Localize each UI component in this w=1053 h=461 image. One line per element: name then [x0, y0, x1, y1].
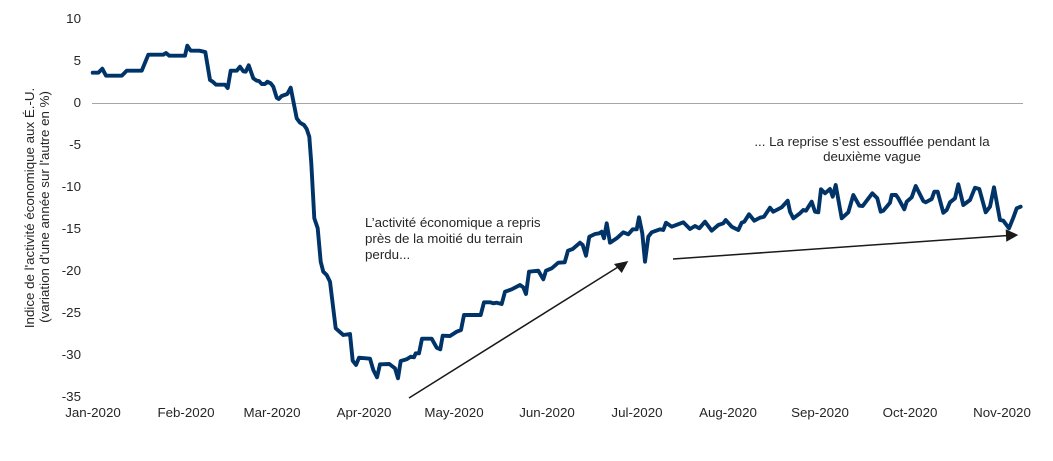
- y axis tick labels: -10: [62, 179, 81, 194]
- x axis month labels: Mar-2020: [243, 405, 301, 420]
- x axis month labels: May-2020: [424, 405, 484, 420]
- annotation: recovery text: près de la moitié du terrain: [365, 231, 523, 246]
- annotation: second wave text: [754, 134, 990, 164]
- x axis month labels: Feb-2020: [157, 405, 215, 420]
- x axis month labels: Nov-2020: [973, 405, 1031, 420]
- annotation: recovery text: [365, 215, 541, 262]
- annotation: second wave text: ... La reprise s’est essoufflée pendant la: [754, 134, 990, 149]
- zero baseline: [92, 102, 1023, 104]
- y axis tick labels: -30: [62, 347, 81, 362]
- x axis month labels: Oct-2020: [883, 405, 937, 420]
- y axis tick labels: 10: [66, 11, 81, 26]
- y axis tick labels: [62, 11, 81, 404]
- annotation: recovery text: perdu...: [365, 247, 410, 262]
- x axis month labels: Sep-2020: [791, 405, 849, 420]
- y axis tick labels: -35: [62, 389, 81, 404]
- y axis tick labels: 0: [74, 95, 81, 110]
- annotation: recovery text: L’activité économique a repris: [365, 215, 541, 230]
- y axis tick labels: -15: [62, 221, 81, 236]
- y axis title: [22, 88, 52, 328]
- y axis tick labels: -25: [62, 305, 81, 320]
- y axis title: (variation d'une année sur l'autre en %): [37, 91, 52, 323]
- y axis title: Indice de l'activité économique aux É.-U.: [22, 88, 37, 328]
- x axis month labels: Apr-2020: [337, 405, 391, 420]
- arrow: second wave plateau: [673, 229, 1018, 259]
- x axis month labels: Jan-2020: [65, 405, 121, 420]
- x axis month labels: Jun-2020: [519, 405, 575, 420]
- x axis month labels: [65, 405, 1031, 420]
- x axis month labels: Jul-2020: [611, 405, 663, 420]
- annotation: second wave text: deuxième vague: [823, 149, 921, 164]
- x axis month labels: Aug-2020: [699, 405, 757, 420]
- arrow: recovery rise: [409, 261, 628, 398]
- y axis tick labels: -5: [69, 137, 81, 152]
- y axis tick labels: 5: [74, 53, 81, 68]
- data line: [93, 46, 1021, 378]
- y axis tick labels: -20: [62, 263, 81, 278]
